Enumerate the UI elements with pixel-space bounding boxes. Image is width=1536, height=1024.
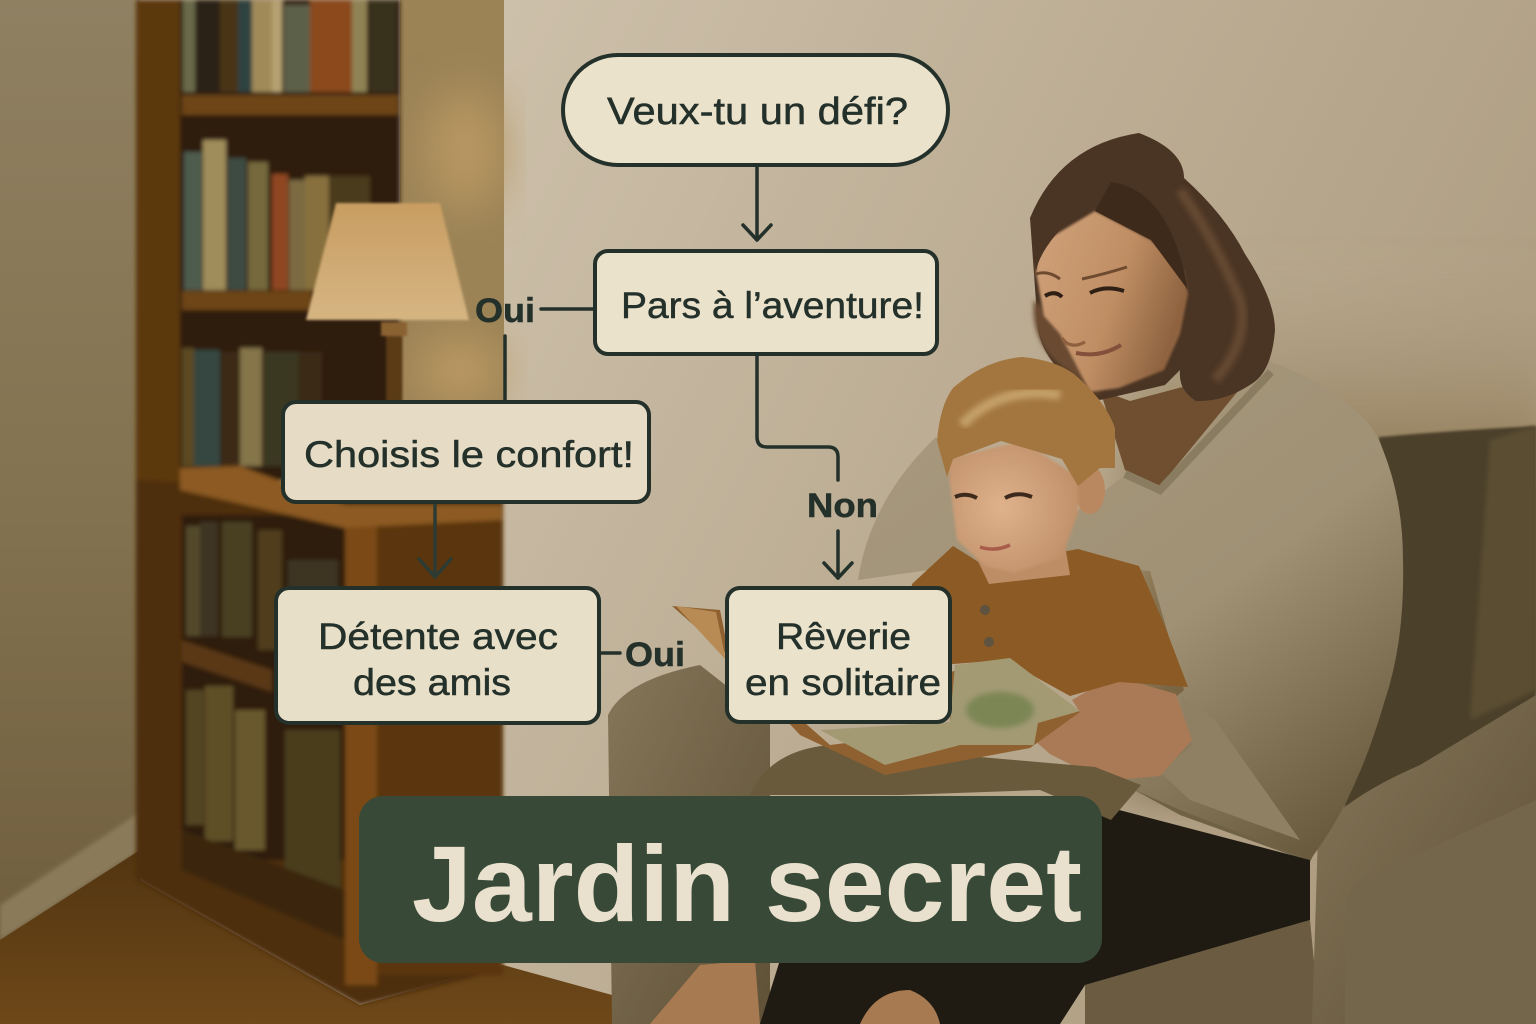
sweater [858,361,1403,860]
neck [1100,368,1257,486]
eyes and mouth [955,494,1032,498]
connector: détente to Oui [601,651,620,655]
legs [750,745,1141,820]
bookshelf [136,0,503,1005]
node: Rêverie en solitaire: en solitaire [745,662,941,703]
connector: aventure to Non [757,354,838,480]
arrow: confort to détente [419,503,451,577]
connector: Oui to confort [503,336,507,400]
node: Choisis le confort: Choisis le confort! [304,434,634,475]
title banner: Jardin secret [359,796,1102,963]
node: Détente avec des amis: des amis [353,662,511,703]
node: Veux-tu un défi: Veux-tu un défi? [607,91,908,133]
connector: aventure to Oui [541,307,594,311]
shirt [905,546,1188,696]
face [947,441,1078,573]
node: Détente avec des amis: Détente avec [318,616,558,657]
hair [1030,133,1275,401]
mother [650,133,1403,1024]
neck [975,545,1070,584]
sweater lower shadow [1080,740,1350,862]
arrow: défi to aventure [743,165,771,240]
node: Veux-tu un défi [563,55,948,165]
node: Choisis le confort [283,402,649,502]
child [750,357,1188,820]
label: Oui upper: Oui [475,292,535,330]
trousers and feet [760,805,1310,1024]
label: Non: Non [807,487,878,525]
eyes, nose and mouth [1036,267,1127,279]
shirt cuff and hand [1160,696,1300,840]
flowchart connectors [419,165,852,653]
label: Oui lower: Oui [625,636,685,674]
node: Rêverie en solitaire [727,588,950,722]
node: Pars à l'aventure [595,251,937,354]
node: Détente avec des amis [276,588,599,723]
picture book [672,606,1080,775]
armchair [608,426,1536,1024]
hair [937,357,1115,486]
arrow: Non to rêverie [824,531,852,578]
face [1036,211,1188,392]
node: Rêverie en solitaire: Rêverie [776,616,911,657]
title banner: Jardin secret: Jardin secret [412,823,1082,944]
ear [1075,466,1105,514]
node: Pars à l'aventure: Pars à l’aventure! [621,285,924,326]
lamp [306,203,469,402]
